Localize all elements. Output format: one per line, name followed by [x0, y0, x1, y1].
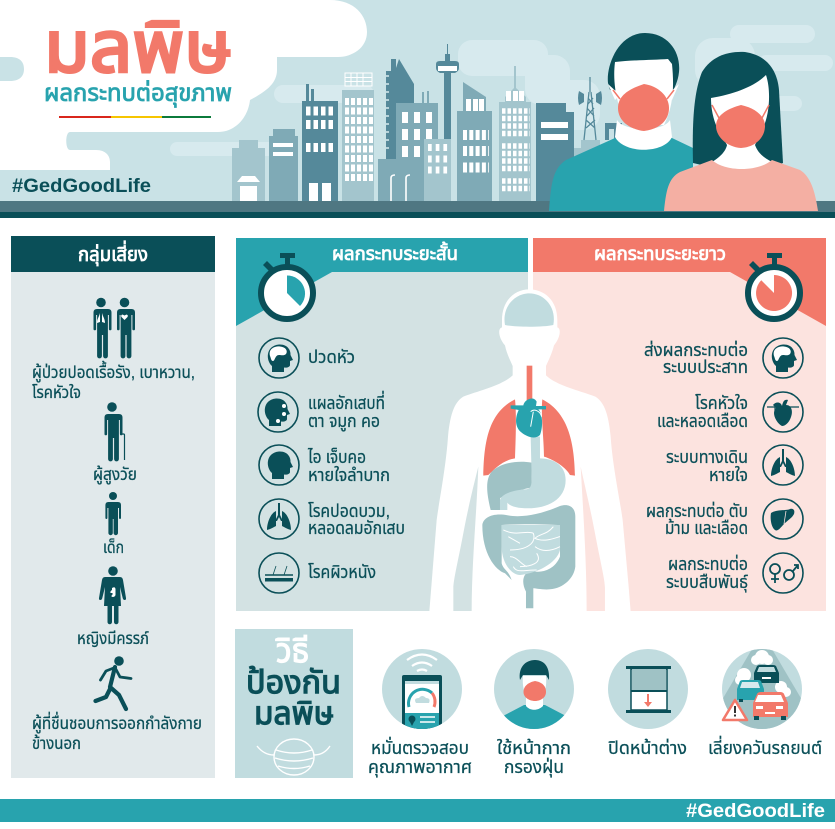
label: pregnant woman: หญิงมีครรภ์: [77, 629, 149, 648]
ground strip: [0, 201, 835, 212]
icon: warning triangle: [723, 700, 747, 720]
prevention: avoid car exhaust: [708, 649, 822, 758]
header banner: [0, 0, 835, 218]
icon: two patients: [94, 298, 135, 358]
icon: skin: [259, 553, 299, 593]
label: chronic patients: โรคหัวใจ: [32, 383, 81, 402]
risk groups header: [11, 236, 215, 272]
label: nervous system: ส่งผลกระทบต่อ: [644, 340, 748, 360]
label: close window: ปิดหน้าต่าง: [608, 738, 687, 758]
label: pneumonia: หลอดลมอักเสบ: [308, 518, 405, 538]
label: avoid car exhaust: เลี่ยงควันรถยนต์: [708, 735, 822, 758]
dark ground line: [0, 212, 835, 218]
label: irritation: แผลอักเสบที่: [308, 390, 385, 413]
heart: [511, 398, 546, 438]
background clouds: [170, 25, 833, 156]
label: wear mask: ใช้หน้ากาก: [497, 738, 571, 758]
label: skin disease: โรคผิวหนัง: [308, 562, 376, 582]
prevention heading: [246, 632, 341, 731]
label: irritation: ตา จมูก คอ: [308, 411, 380, 433]
icon: wifi: [407, 654, 437, 671]
man with mask: [549, 33, 693, 211]
colon: [482, 505, 575, 608]
icon: reproductive: [763, 553, 803, 593]
label: nervous system: [644, 340, 748, 377]
label: liver, spleen, blood: [646, 501, 748, 538]
label: heart and blood vessels: [657, 393, 748, 431]
label: reproductive: ระบบสืบพันธุ์: [666, 572, 748, 593]
long-term header band: [533, 238, 826, 326]
icon: masked person: [502, 660, 566, 729]
liver: [487, 462, 532, 510]
icon: pregnant woman: [99, 566, 126, 624]
icon: child: [105, 492, 121, 535]
footer hashtag: #GedGoodLife: [686, 801, 825, 822]
label: headache: ปวดหัว: [308, 347, 355, 367]
white title cloud: [0, 0, 367, 170]
label: check air quality: [368, 736, 472, 778]
icon: stopwatch short: [261, 253, 313, 319]
label: cough: ไอ เจ็บคอ: [307, 447, 366, 467]
small intestine: [502, 525, 560, 575]
label: pneumonia: [308, 501, 405, 538]
icon: cough head: [259, 445, 299, 485]
tricolour line: [59, 116, 211, 118]
label: cough: [307, 447, 390, 485]
icon: mask outline: [257, 739, 330, 775]
label: check air quality: หมั่นตรวจสอบ: [371, 736, 469, 758]
label: wear mask: กรองฝุ่น: [504, 757, 564, 778]
label: outdoor exercisers: [32, 711, 202, 753]
label: liver, spleen, blood: ผลกระทบต่อ ตับ: [646, 501, 748, 521]
label: cough: หายใจลำบาก: [308, 465, 390, 485]
subtitle: ผลกระทบต่อสุขภาพ: [44, 79, 232, 108]
icon: phone with air gauge: [402, 675, 442, 733]
icon: stopwatch long: [748, 253, 800, 319]
label: respiratory: [666, 447, 748, 485]
panel: risk groups: [11, 236, 215, 778]
brain: [504, 293, 554, 327]
label: reproductive: ผลกระทบต่อ: [668, 554, 748, 574]
short-term header band: [236, 238, 528, 326]
risk groups heading: กลุ่มเสี่ยง: [78, 240, 148, 266]
label: outdoor exercisers: ข้างนอก: [32, 733, 81, 753]
label: chronic patients: [32, 360, 195, 402]
label: elderly: ผู้สูงวัย: [93, 464, 137, 486]
label: irritation: [308, 390, 385, 433]
stomach: [500, 437, 566, 510]
prevention heading: ป้องกัน: [246, 664, 341, 700]
icon: window: [626, 666, 671, 713]
icon: runner: [96, 656, 131, 709]
icon: nervous system: [763, 338, 803, 378]
icon: traffic with exhaust: [722, 649, 802, 729]
label: outdoor exercisers: ผู้ที่ชื่นชอบการออกกำลังกาย: [32, 711, 202, 735]
prevention: close window: [608, 649, 688, 758]
label: child: เด็ก: [103, 538, 124, 557]
prevention heading: วิธี: [275, 632, 309, 670]
woman with mask: [664, 52, 818, 211]
prevention: wear mask: [494, 649, 574, 778]
prevention: check air quality: [368, 649, 472, 778]
icon: elderly: [104, 402, 124, 461]
label: chronic patients: ผู้ป่วยปอดเรื้อรัง, เบาหวาน,: [32, 360, 195, 384]
label: nervous system: ระบบประสาท: [663, 357, 748, 377]
hashtag: #GedGoodLife: [12, 176, 151, 197]
panel: short-term effects: [236, 238, 528, 611]
city skyline: [232, 44, 622, 201]
prevention heading: มลพิษ: [254, 695, 334, 731]
body silhouette: [429, 289, 631, 612]
long-term heading: ผลกระทบระยะยาว: [594, 244, 726, 265]
icon: headache: [259, 338, 299, 378]
label: check air quality: คุณภาพอากาศ: [368, 757, 472, 778]
icon: heart: [763, 392, 803, 432]
label: wear mask: [497, 738, 571, 778]
footer bar: [0, 799, 835, 822]
panel: long-term effects: [533, 238, 826, 611]
label: liver, spleen, blood: ม้าม และเลือด: [665, 518, 748, 538]
label: heart and blood vessels: และหลอดเลือด: [657, 411, 748, 431]
icon: lungs long: [763, 445, 803, 485]
label: pneumonia: โรคปอดบวม,: [308, 501, 390, 521]
title: มลพิษ: [44, 8, 232, 88]
icon: irritation of eyes nose throat: [258, 392, 298, 432]
body diagram: [429, 289, 631, 612]
label: heart and blood vessels: โรคหัวใจ: [695, 393, 748, 413]
label: respiratory: หายใจ: [709, 465, 748, 485]
trachea and lungs: [483, 366, 575, 476]
icon: liver: [763, 499, 803, 539]
icon: lungs short: [259, 499, 299, 539]
label: reproductive: [666, 554, 748, 593]
short-term heading: ผลกระทบระยะสั้น: [332, 241, 458, 265]
label: respiratory: ระบบทางเดิน: [666, 447, 748, 467]
panel: prevention title box: [235, 629, 353, 778]
